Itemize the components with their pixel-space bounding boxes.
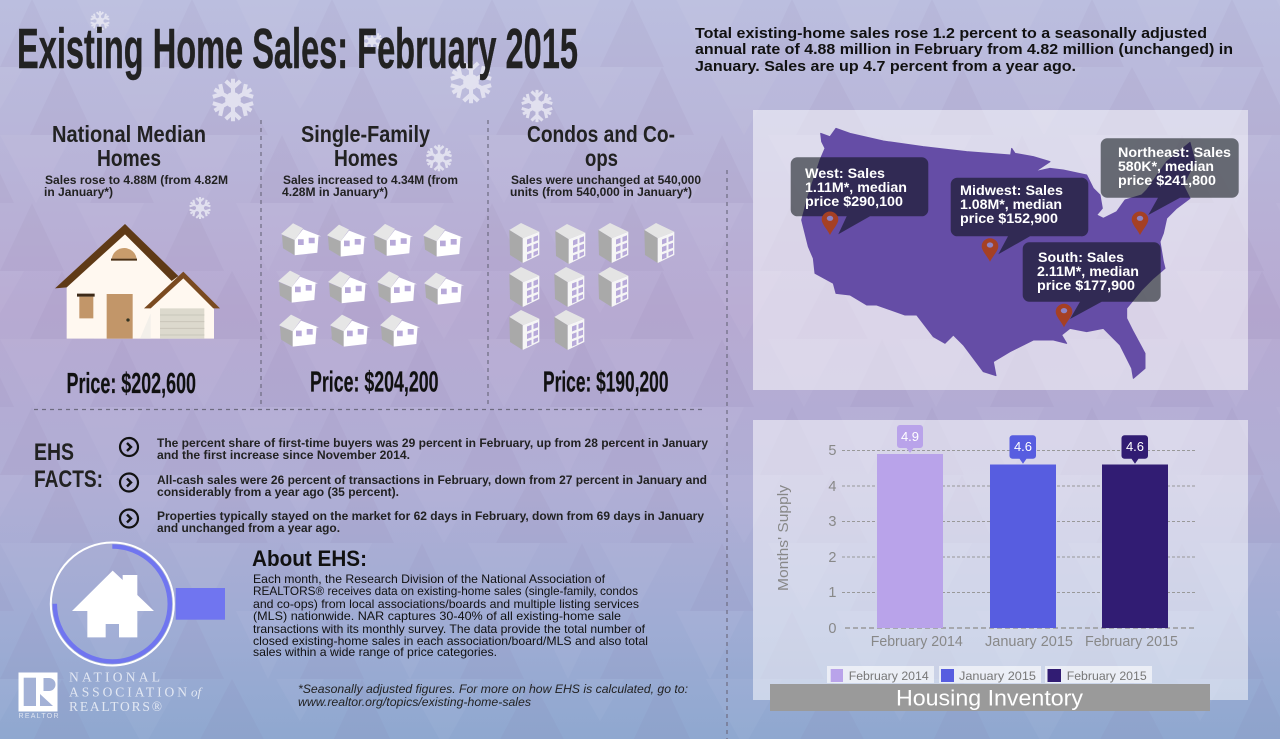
y axis labels: 0 xyxy=(828,621,836,637)
text: single-family sales xyxy=(282,173,458,199)
text: single-family sales: Sales increased to 4.34M (from xyxy=(283,173,458,187)
legend: January 2015 xyxy=(959,669,1036,683)
icons: building pictogram xyxy=(509,223,674,350)
logo: National Association of Realtors: REALTOR xyxy=(18,713,58,720)
text: about EHS: REALTORS® receives data on existing-home sales (single-family, condos xyxy=(253,585,638,598)
footnote: *Seasonally adjusted figures. For more on how EHS is calculated, go to: xyxy=(298,682,688,696)
legend: February 2014 xyxy=(849,669,929,683)
callout: west: price $290,100 xyxy=(805,193,903,209)
summary paragraph xyxy=(695,26,1233,75)
title: Existing Home Sales: February 2015 xyxy=(17,17,578,81)
heading: single-family homes xyxy=(301,121,430,171)
bar: January 2015: 4.6 xyxy=(1014,439,1032,454)
heading: about EHS: About EHS: xyxy=(252,546,367,571)
y axis labels: 1 xyxy=(828,585,836,601)
text: national sales: Sales rose to 4.88M (from 4.82M xyxy=(45,173,228,187)
callout: northeast: Northeast: Sales xyxy=(1118,144,1231,160)
chart title bar xyxy=(770,684,1210,711)
fact 2: considerably from a year ago (35 percent). xyxy=(157,487,399,499)
bar: February 2014 xyxy=(877,425,943,628)
fact 3: and unchanged from a year ago. xyxy=(157,523,340,535)
panel: regional map xyxy=(753,110,1248,390)
fact 1 xyxy=(157,438,709,462)
callout: west: West: Sales xyxy=(805,165,885,181)
callout: south: South: Sales xyxy=(1038,249,1124,265)
fact 2 xyxy=(157,475,707,499)
fact 1: and the first increase since November 2014. xyxy=(157,450,410,462)
fact 2: All-cash sales were 26 percent of transactions in February, down from 27 percent in January and xyxy=(157,475,707,487)
text: about EHS: (MLS) nationwide. NAR captures 30-40% of all existing-home sale xyxy=(253,610,621,623)
icon: arrow bullet 3 xyxy=(120,510,138,528)
heading: EHS facts: FACTS: xyxy=(34,466,103,493)
text: condo sales xyxy=(510,173,701,199)
callout: northeast: 580K*, median xyxy=(1118,158,1214,174)
callout: west: 1.11M*, median xyxy=(805,179,907,195)
y axis labels: 3 xyxy=(828,514,836,530)
callout: northeast: price $241,800 xyxy=(1118,172,1216,188)
logo: National Association of Realtors: REALTORS® xyxy=(69,699,162,714)
y axis labels: 5 xyxy=(828,443,836,459)
logo: National Association of Realtors: NATIONAL xyxy=(69,670,160,685)
icons: house pictogram xyxy=(278,223,464,347)
panel: EHS facts xyxy=(34,438,709,535)
fact 1: The percent share of first-time buyers was 29 percent in February, up from 28 percent in January xyxy=(157,438,709,450)
logo: National Association of Realtors: ASSOCIATION xyxy=(69,685,187,700)
legend xyxy=(827,666,1152,683)
x axis labels: February 2015 xyxy=(1085,634,1178,650)
text: about EHS xyxy=(253,573,648,659)
fact 3: Properties typically stayed on the market for 62 days in February, down from 69 days in January xyxy=(157,511,705,523)
panel: single-family homes xyxy=(278,121,464,398)
footnote xyxy=(298,682,688,709)
bar: February 2014: 4.9 xyxy=(901,429,919,444)
callout: west xyxy=(791,157,928,235)
callout: midwest: 1.08M*, median xyxy=(960,196,1062,212)
icon: house xyxy=(55,224,220,339)
text: about EHS: transactions with its monthly survey. The data provide the total number of xyxy=(253,623,646,636)
icon: arrow bullet 2 xyxy=(120,474,138,492)
heading: condos and co-ops: ops xyxy=(585,145,618,171)
text: single-family sales: 4.28M in January*) xyxy=(282,185,388,199)
callout: south xyxy=(1023,242,1161,327)
text: about EHS: sales within a wide range of price categories. xyxy=(253,646,497,659)
x axis labels xyxy=(871,634,1178,650)
y axis labels: 4 xyxy=(828,479,836,495)
heading: condos and co-ops xyxy=(527,121,675,171)
y axis labels: 2 xyxy=(828,550,836,566)
heading: EHS facts: EHS xyxy=(34,439,74,466)
heading: single-family homes: Single-Family xyxy=(301,121,430,147)
callout: south: 2.11M*, median xyxy=(1037,263,1139,279)
callout: midwest xyxy=(951,178,1088,262)
map: United States xyxy=(802,128,1195,378)
callout: midwest: Midwest: Sales xyxy=(960,182,1063,198)
icon: arrow bullet 1 xyxy=(120,438,138,456)
snowflakes xyxy=(90,11,554,219)
price: national: Price: $202,600 xyxy=(66,368,196,400)
logo: National Association of Realtors xyxy=(18,670,204,720)
text: about EHS: and co-ops) from local associations/boards and multiple listing services xyxy=(253,598,639,611)
price: condos: Price: $190,200 xyxy=(543,366,668,398)
panel: housing inventory chart xyxy=(753,420,1248,711)
x axis labels: January 2015 xyxy=(985,634,1073,650)
text: national sales: in January*) xyxy=(44,185,113,199)
logo: National Association of Realtors: of xyxy=(191,685,204,700)
fact 3 xyxy=(157,511,705,535)
callout: south: price $177,900 xyxy=(1037,277,1135,293)
summary paragraph: January. Sales are up 4.7 percent from a year ago. xyxy=(695,59,1076,75)
heading: national median homes: Homes xyxy=(97,145,161,171)
y axis labels xyxy=(828,443,836,637)
bar: February 2015: 4.6 xyxy=(1126,439,1144,454)
callout: midwest: price $152,900 xyxy=(960,210,1058,226)
text: condo sales: units (from 540,000 in January*) xyxy=(510,185,692,199)
text: national sales xyxy=(44,173,228,199)
heading: national median homes: National Median xyxy=(52,121,206,147)
summary paragraph: Total existing-home sales rose 1.2 percent to a seasonally adjusted xyxy=(695,26,1207,42)
summary paragraph: annual rate of 4.88 million in February from 4.82 million (unchanged) in xyxy=(695,42,1233,58)
footnote: www.realtor.org/topics/existing-home-sales xyxy=(298,695,531,709)
panel: national median homes xyxy=(44,121,228,400)
callout: northeast xyxy=(1101,138,1239,235)
text: condo sales: Sales were unchanged at 540,000 xyxy=(511,173,701,187)
bar: February 2015 xyxy=(1102,435,1168,628)
icon: circled house with tab xyxy=(51,542,225,666)
panel: condos and co-ops xyxy=(509,121,701,398)
y axis title: Months' Supply xyxy=(776,484,792,591)
price: single-family: Price: $204,200 xyxy=(310,366,438,398)
heading: national median homes xyxy=(52,121,206,171)
panel: about EHS xyxy=(252,546,648,659)
heading: EHS facts xyxy=(34,439,103,493)
legend: February 2015 xyxy=(1067,669,1147,683)
text: about EHS: closed existing-home sales in each association/board/MLS and also total xyxy=(253,635,648,648)
bar: January 2015 xyxy=(990,435,1056,628)
heading: condos and co-ops: Condos and Co- xyxy=(527,121,675,147)
heading: single-family homes: Homes xyxy=(334,145,398,171)
chart title bar: Housing Inventory xyxy=(896,686,1083,710)
x axis labels: February 2014 xyxy=(871,634,963,650)
text: about EHS: Each month, the Research Division of the National Association of xyxy=(253,573,606,586)
